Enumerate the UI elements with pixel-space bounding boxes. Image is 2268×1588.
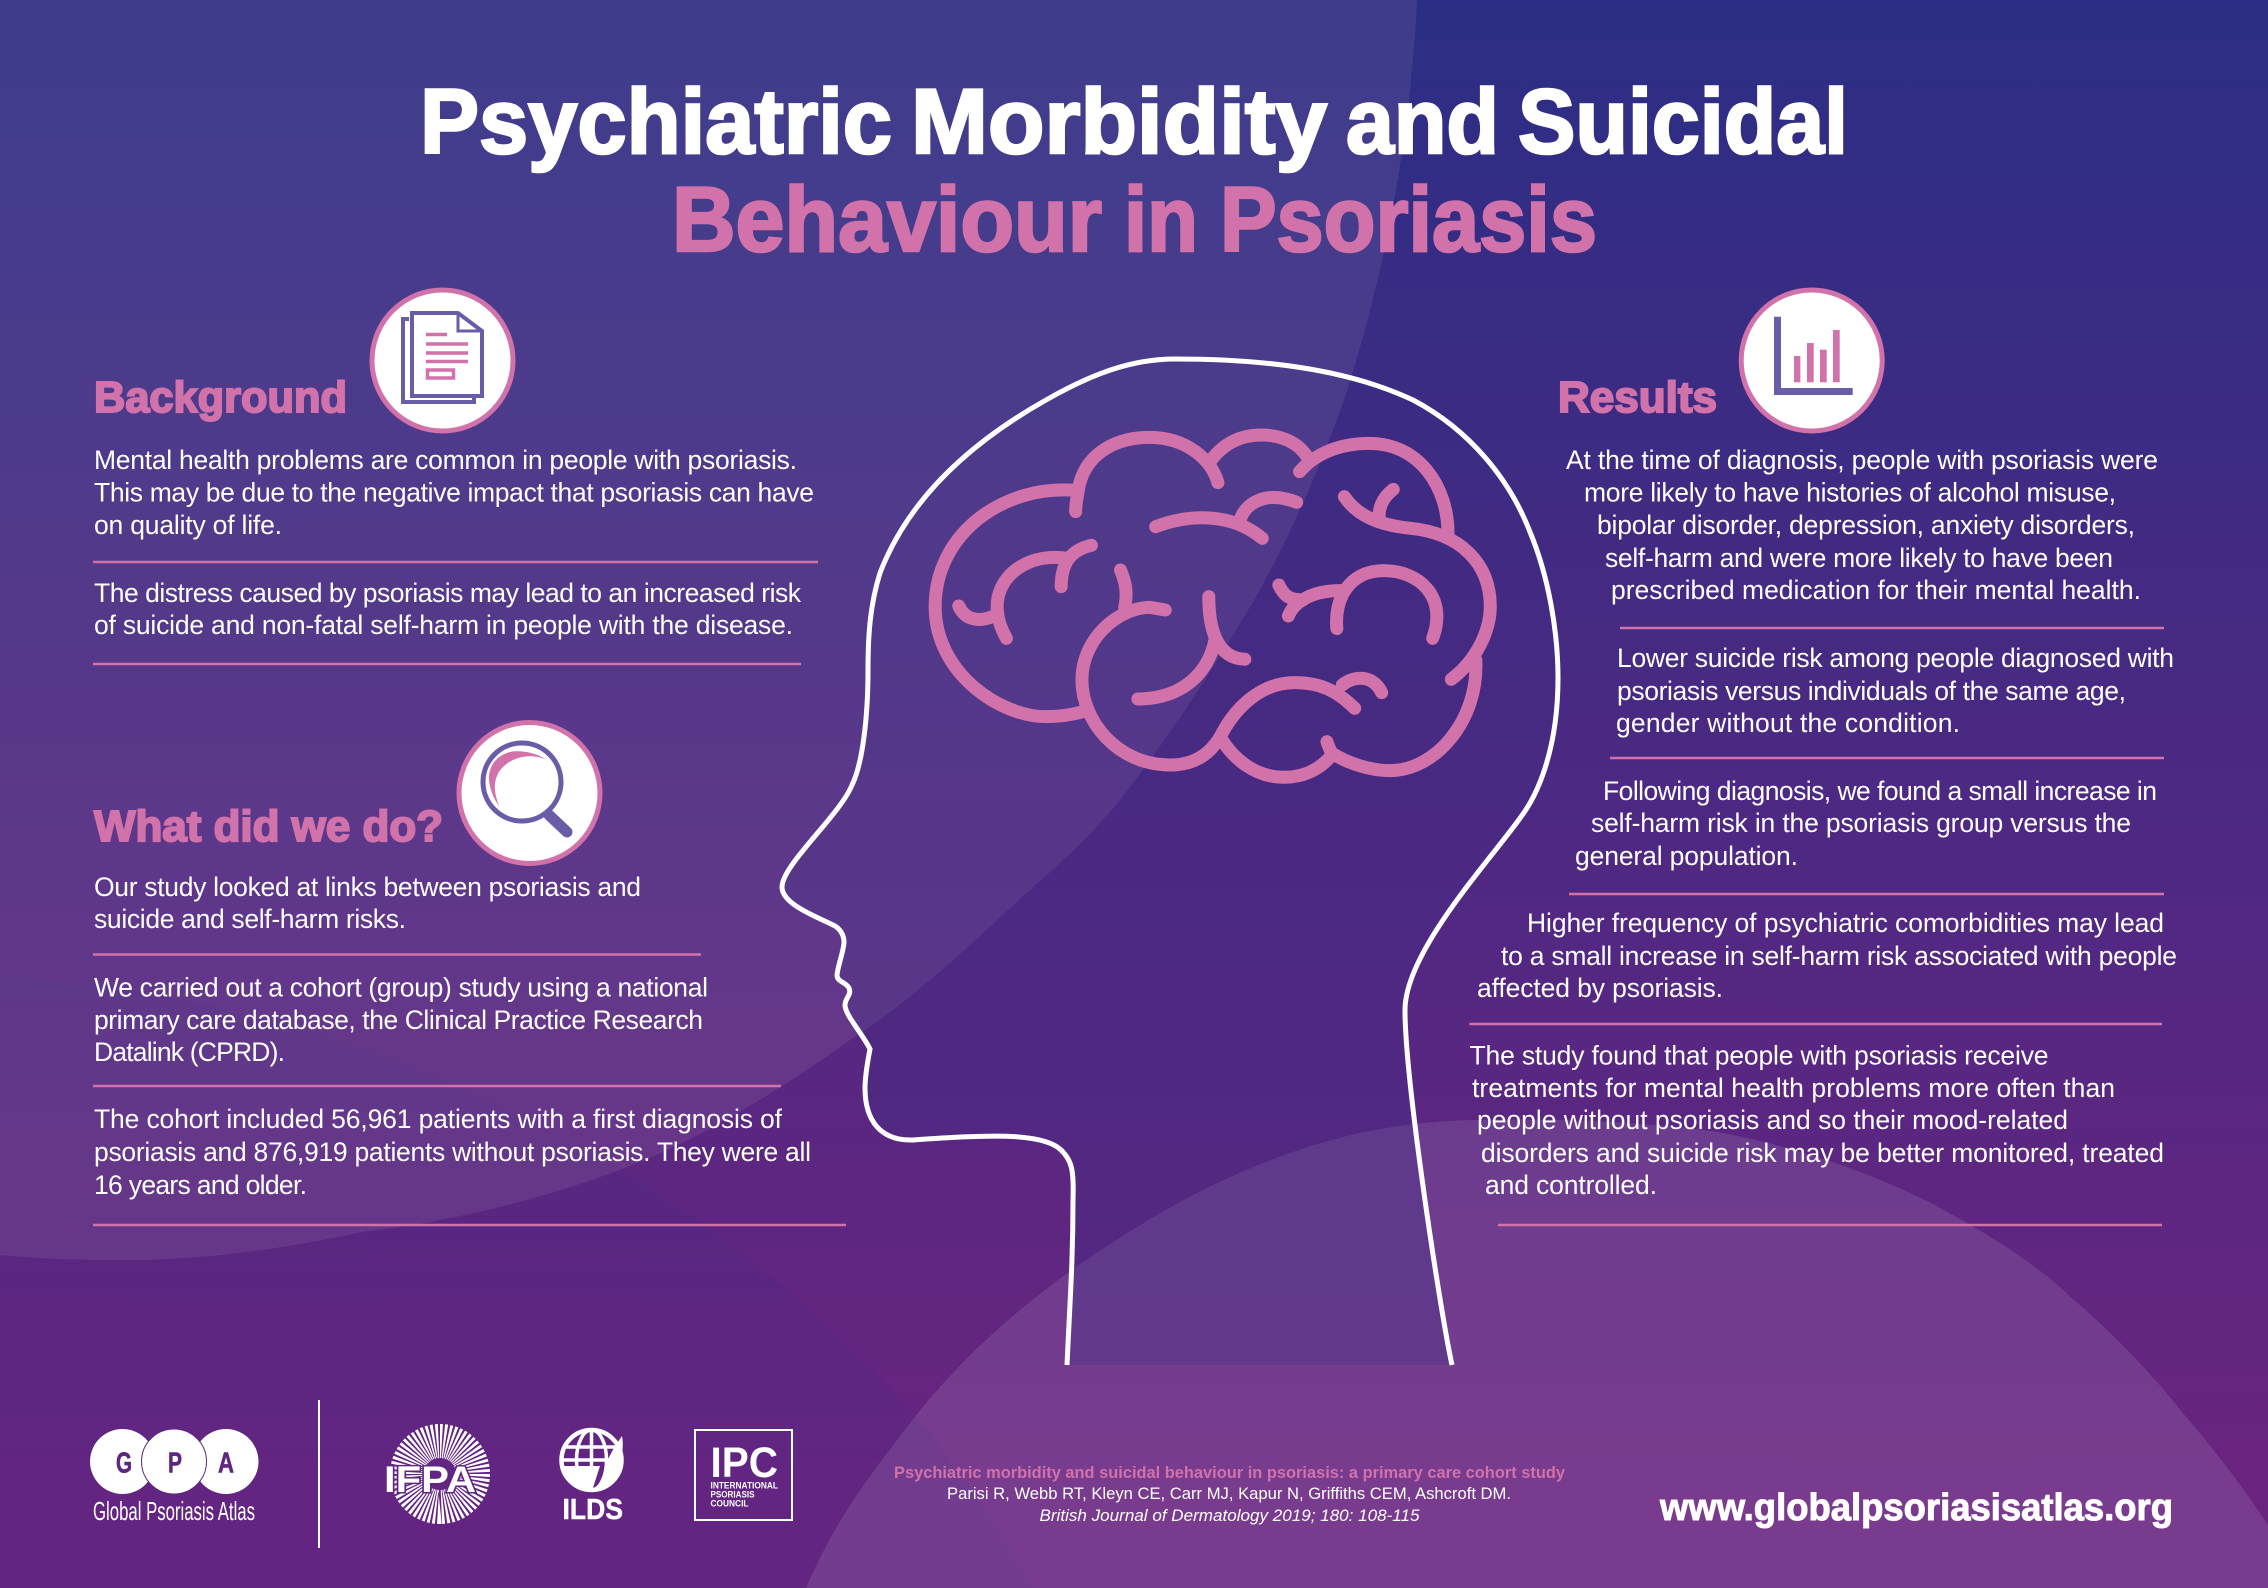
- icon: document: [372, 290, 513, 431]
- logo: ipc: INTERNATIONAL: [710, 1481, 778, 1492]
- logo: ilds: ILDS: [562, 1494, 623, 1526]
- text: results paragraph two: [1616, 643, 2174, 738]
- text: background paragraph one: on quality of life.: [94, 510, 282, 540]
- title: [420, 71, 1848, 271]
- citation: [894, 1463, 1566, 1525]
- heading: background: Background: [94, 373, 347, 422]
- logo: ipc: COUNCIL: [710, 1499, 749, 1510]
- logo: global psoriasis atlas: Global Psoriasis Atlas: [93, 1496, 255, 1526]
- text: what did we do paragraph one: [94, 872, 641, 934]
- logo: ifpa: IFPA: [384, 1459, 476, 1500]
- text: results paragraph three: self-harm risk in the psoriasis group versus the: [1591, 808, 2131, 838]
- title: and: [1346, 71, 1499, 173]
- text: what did we do paragraph three: [94, 1104, 811, 1200]
- text: results paragraph four: to a small increase in self-harm risk associated with people: [1501, 941, 2177, 971]
- text: what did we do paragraph two: [94, 972, 708, 1067]
- text: results paragraph one: bipolar disorder, depression, anxiety disorders,: [1597, 510, 2135, 540]
- text: results paragraph two: Lower suicide risk among people diagnosed with: [1617, 643, 2174, 673]
- text: results paragraph four: affected by psoriasis.: [1477, 973, 1723, 1003]
- title: Suicidal: [1518, 71, 1848, 173]
- text: results paragraph five: [1470, 1040, 2164, 1200]
- icon: brain: [935, 435, 1490, 777]
- title: in: [1124, 169, 1198, 271]
- text: what did we do paragraph two: Datalink (CPRD).: [94, 1037, 285, 1067]
- title: Behaviour: [672, 169, 1102, 271]
- text: what did we do paragraph one: Our study looked at links between psoriasis and: [94, 872, 641, 902]
- icon: magnifying glass: [459, 722, 600, 864]
- text: results paragraph four: [1477, 908, 2177, 1003]
- text: results paragraph one: At the time of diagnosis, people with psoriasis were: [1566, 445, 2158, 475]
- text: results paragraph two: psoriasis versus individuals of the same age,: [1617, 676, 2126, 706]
- text: background paragraph two: The distress caused by psoriasis may lead to an increased risk: [94, 578, 802, 608]
- logo: ipc: PSORIASIS: [710, 1490, 754, 1501]
- text: what did we do paragraph two: We carried out a cohort (group) study using a national: [94, 972, 708, 1002]
- text: background paragraph two: [94, 578, 802, 640]
- citation: Psychiatric morbidity and suicidal behaviour in psoriasis: a primary care cohort study: [894, 1463, 1566, 1482]
- logo: ipc: [695, 1430, 792, 1520]
- text: results paragraph five: and controlled.: [1485, 1170, 1657, 1200]
- text: results paragraph three: general population.: [1575, 841, 1798, 871]
- website url: www.globalpsoriasisatlas.org: [1659, 1487, 2173, 1529]
- title: Morbidity: [911, 71, 1327, 173]
- text: background paragraph one: [94, 445, 814, 540]
- head line: [782, 359, 1558, 1365]
- text: results paragraph five: disorders and suicide risk may be better monitored, treated: [1481, 1138, 2164, 1168]
- text: results paragraph five: treatments for mental health problems more often than: [1472, 1073, 2115, 1103]
- text: results paragraph one: more likely to have histories of alcohol misuse,: [1584, 478, 2116, 508]
- heading: what did we do: What did we do?: [94, 802, 443, 851]
- text: results paragraph one: prescribed medication for their mental health.: [1611, 575, 2141, 605]
- logo: global psoriasis atlas: P: [168, 1448, 182, 1480]
- logo: ipc: IPC: [710, 1439, 778, 1487]
- title: Psoriasis: [1220, 169, 1597, 271]
- text: background paragraph one: Mental health problems are common in people with psoriasis.: [94, 445, 797, 475]
- text: what did we do paragraph three: The cohort included 56,961 patients with a first diagnosis of: [94, 1104, 783, 1134]
- citation: British Journal of Dermatology 2019; 180: 108-115: [1040, 1506, 1420, 1525]
- text: results paragraph three: [1575, 776, 2157, 871]
- text: results paragraph one: [1566, 445, 2158, 605]
- citation: Parisi R, Webb RT, Kleyn CE, Carr MJ, Kapur N, Griffiths CEM, Ashcroft DM.: [947, 1484, 1511, 1503]
- text: what did we do paragraph one: suicide and self-harm risks.: [94, 904, 406, 934]
- text: results paragraph four: Higher frequency of psychiatric comorbidities may lead: [1527, 908, 2164, 938]
- text: background paragraph one: This may be due to the negative impact that psoriasis can have: [94, 478, 814, 508]
- text: what did we do paragraph two: primary care database, the Clinical Practice Research: [94, 1005, 703, 1035]
- text: results paragraph one: self-harm and were more likely to have been: [1605, 543, 2113, 573]
- icon: bar chart: [1741, 290, 1882, 431]
- text: results paragraph five: people without psoriasis and so their mood-related: [1477, 1105, 2068, 1135]
- title: Psychiatric: [420, 71, 892, 173]
- head outline: [782, 359, 1558, 1365]
- panel: what did we do: [93, 722, 846, 1225]
- logo: global psoriasis atlas: G: [116, 1448, 132, 1480]
- logo: global psoriasis atlas: [90, 1429, 258, 1526]
- panel: background: [93, 290, 818, 664]
- logo: ifpa: [384, 1441, 476, 1507]
- text: results paragraph five: The study found that people with psoriasis receive: [1470, 1040, 2048, 1070]
- text: results paragraph three: Following diagnosis, we found a small increase in: [1603, 776, 2157, 806]
- text: results paragraph two: gender without the condition.: [1616, 708, 1960, 738]
- text: what did we do paragraph three: psoriasis and 876,919 patients without psoriasis. They were all: [94, 1137, 811, 1167]
- heading: results: Results: [1558, 373, 1717, 422]
- panel: results: [1470, 290, 2177, 1225]
- text: background paragraph two: of suicide and non-fatal self-harm in people with the disease.: [94, 610, 793, 640]
- text: what did we do paragraph three: 16 years and older.: [94, 1170, 307, 1200]
- logo: ilds: [560, 1430, 623, 1526]
- logo: global psoriasis atlas: A: [218, 1448, 234, 1480]
